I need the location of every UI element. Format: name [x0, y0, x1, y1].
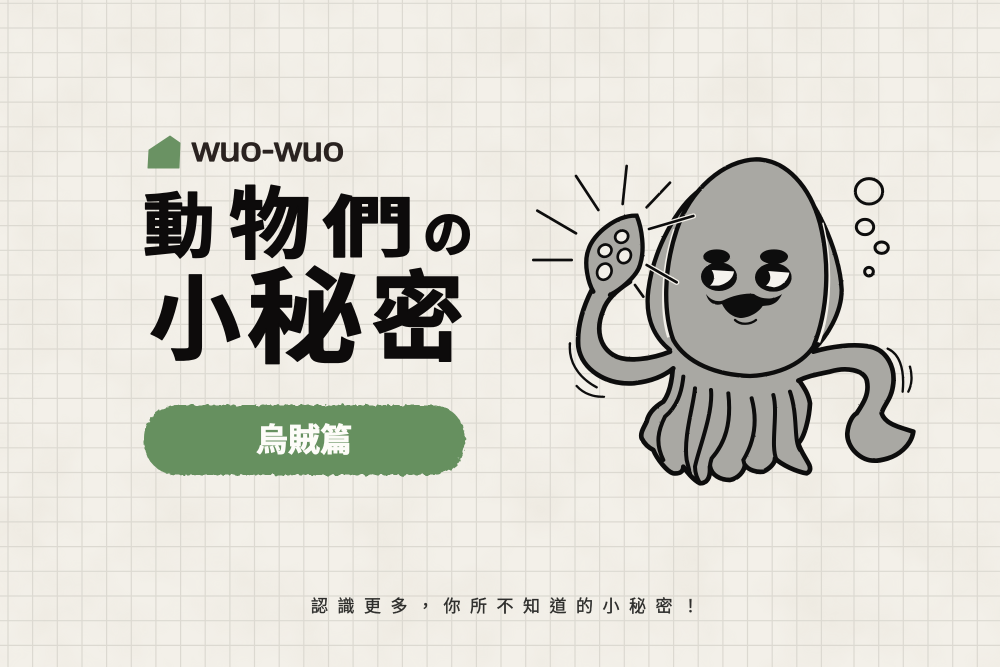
footer tagline: 認識更多，你所不知道的小秘密！: [311, 597, 708, 616]
squid illustration: [533, 159, 913, 483]
eyes: [701, 262, 737, 291]
squid body: [666, 159, 826, 376]
title: 小: [149, 270, 241, 372]
chin: [735, 320, 756, 324]
title: 們: [322, 191, 414, 266]
title: 動: [143, 188, 215, 267]
moustache mouth: [706, 294, 782, 318]
title: 密: [371, 266, 464, 375]
squid body paper gap: [666, 223, 827, 342]
subtitle pill: [144, 405, 465, 475]
emphasis rays: [533, 166, 693, 297]
title: 秘: [246, 262, 364, 376]
pill shape: [144, 405, 465, 475]
eyebrows: [703, 249, 730, 264]
motion lines: [570, 343, 912, 397]
title: の: [423, 207, 473, 263]
logo: house icon and wordmark: [148, 131, 344, 169]
tentacles: [641, 350, 813, 483]
hand with suckers: [586, 216, 643, 295]
title: [143, 181, 473, 376]
left arm: [578, 282, 677, 383]
squid back shell: [648, 173, 842, 350]
wordmark: wuo-wuo: [191, 131, 344, 169]
right arm with fin: [787, 345, 913, 461]
icon: green house: [148, 136, 180, 168]
title: 物: [229, 181, 311, 269]
bubbles: [855, 179, 888, 276]
pill label: 烏賊篇: [256, 422, 352, 458]
face: [701, 249, 792, 324]
